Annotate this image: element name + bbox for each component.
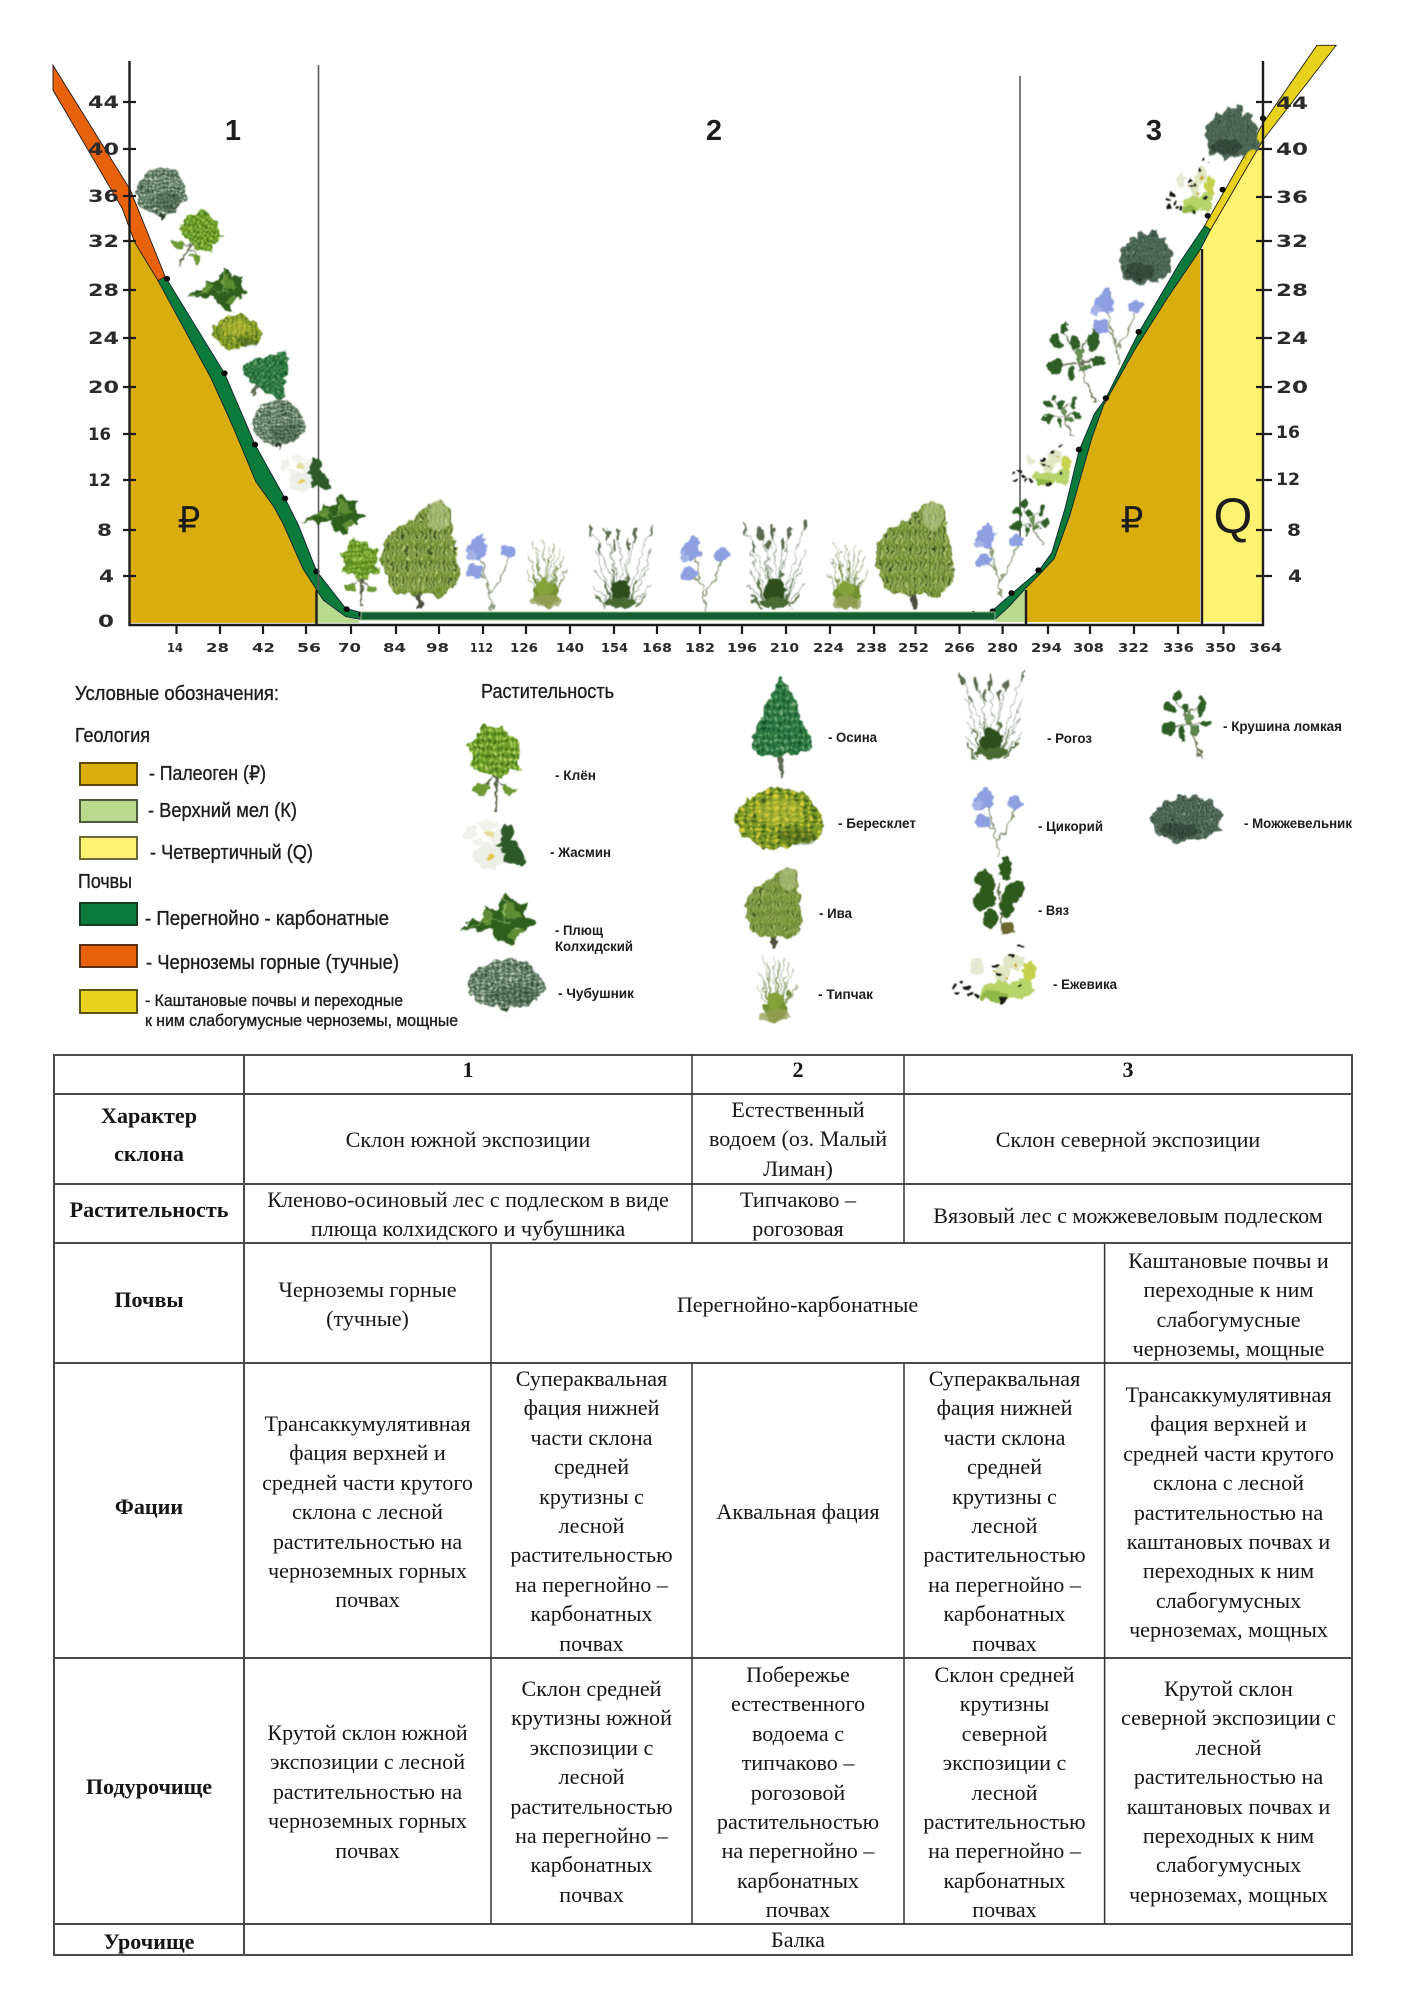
right axis labels: 28 [1276,281,1308,301]
cell: superaqual facies left: Супераквальная [516,1366,667,1391]
bottom axis labels: 196 [727,641,757,655]
legend icon: ivy [460,892,534,946]
cell: superaqual facies left: карбонатных [531,1601,652,1626]
cell: superaqual facies left: почвах [559,1631,624,1656]
label: paleogene: - Палеоген (₽) [149,763,266,785]
right slope geology and soils [970,45,1336,622]
label: reedmace: - Рогоз [1047,730,1092,746]
cell: moderate south slope: Склон средней [522,1676,661,1701]
cell: moderate south slope: крутизны южной [511,1705,672,1730]
left axis labels: 8 [97,521,112,541]
cell: superaqual facies right: растительностью [923,1542,1086,1567]
plant: blackberry low [1013,444,1072,486]
plant: willow right [876,500,955,610]
bottom axis labels: 84 [383,641,406,655]
cell: shoreline: водоема с [752,1721,844,1746]
plant: reedmace 1 [588,522,653,608]
cell: steep south slope: экспозиции с лесной [270,1749,465,1774]
cell: shoreline: карбонатных [737,1868,859,1893]
label: fescue: - Типчак [818,986,874,1002]
cell: shoreline: естественного [731,1691,865,1716]
bottom axis labels: 28 [206,641,229,655]
right axis labels: 24 [1276,329,1308,349]
row label: slope character [101,1103,197,1166]
swatch: paleogene [80,763,137,785]
left axis labels: 16 [88,425,111,445]
cell: chestnut soils: переходные к ним [1144,1277,1313,1302]
label: humus-carbonate: - Перегнойно - карбонатные [145,908,389,930]
plant: chubushnik [137,167,186,221]
cell: gully: Балка [771,1927,825,1952]
label: willow: - Ива [819,905,852,921]
cell: superaqual facies left [510,1366,673,1656]
cell: chestnut soils: слабогумусные [1156,1307,1301,1332]
plant: chicory 2 [679,536,731,612]
legend [75,671,1353,1030]
bottom axis labels: 112 [470,641,493,655]
soil: humus-carbonate slope left [158,277,361,620]
cell: moderate north slope: северной [962,1721,1047,1746]
right axis labels: 4 [1288,567,1302,587]
bottom axis labels: 168 [642,641,672,655]
cell: north slope: Склон северной экспозиции [996,1127,1260,1152]
bottom axis labels [167,641,1282,655]
cell: steep north slope: лесной [1196,1735,1261,1760]
paleogene symbol right: ₽ [1121,500,1143,541]
label: chestnut: - Каштановые почвы и переходные [145,991,403,1010]
left axis labels: 40 [88,140,119,160]
right axis labels: 44 [1276,94,1308,114]
plant: chicory 4 [1091,289,1145,364]
cell: shoreline: на перегнойно – [722,1838,874,1863]
legend icon: euonymus [735,787,823,852]
bottom axis labels: 336 [1163,641,1194,655]
left axis labels: 44 [88,93,119,113]
cell: transaccumulative facies right: переходных к ним [1143,1558,1314,1583]
right axis labels: 40 [1276,140,1308,160]
geology: paleogene right [1026,250,1200,622]
cell: shoreline: почвах [766,1897,830,1922]
cell: steep north slope: переходных к ним [1143,1823,1314,1848]
bottom axis labels: 210 [770,641,799,655]
right axis labels: 8 [1287,521,1301,541]
valley floor soil band [361,612,995,620]
cell: superaqual facies left: фация нижней [524,1395,659,1420]
cell: steep south slope: черноземных горных [268,1808,467,1833]
cell: moderate north slope: карбонатных [944,1868,1065,1893]
legend icon: elm [971,855,1028,934]
cell: superaqual facies left: растительностью [510,1542,673,1567]
cell: moderate north slope: почвах [972,1897,1037,1922]
label: upper cretaceous: - Верхний мел (К) [148,800,297,822]
cell: moderate north slope: экспозиции с [943,1750,1066,1775]
cell: humus-carbonate: Перегнойно-карбонатные [677,1292,918,1317]
soil: humus-carbonate slope right [994,226,1210,619]
bottom axis labels: 294 [1031,641,1062,655]
cell: moderate south slope: карбонатных [531,1852,652,1877]
cell: transaccumulative facies left: склона с лесной [292,1499,443,1524]
cell: superaqual facies right [923,1366,1086,1656]
legend icon: chicory [972,786,1024,857]
cell: superaqual facies right: на перегнойно – [928,1572,1081,1597]
plant: juniper high [1204,104,1260,161]
left axis labels: 28 [88,281,119,301]
plant: elm low [1011,499,1049,547]
soil: chestnut band [1205,45,1336,230]
cell: moderate south slope: лесной [559,1764,624,1789]
header: column 3: 3 [1122,1057,1134,1082]
left axis labels: 32 [88,232,119,252]
cell: shoreline: Побережье [746,1662,850,1687]
cell: moderate north slope: лесной [972,1780,1037,1805]
vegetation heading: Растительность [481,681,614,703]
cell: water body: Естественный [731,1097,865,1122]
cell: transaccumulative facies right: средней части крутого [1123,1441,1334,1466]
cell: transaccumulative facies left [262,1411,473,1612]
cell: moderate south slope: почвах [559,1882,624,1907]
row label: soils: Почвы [114,1287,184,1312]
geology: quaternary [1201,140,1263,622]
zone number 1: 1 [225,115,241,147]
axis ticks [123,102,1272,634]
bottom axis labels: 182 [685,641,715,655]
cell: chestnut soils: Каштановые почвы и [1128,1248,1329,1273]
cell: moderate south slope: растительностью [510,1794,673,1819]
soil sample points right [970,115,1266,617]
cell: moderate north slope: крутизны [960,1691,1049,1716]
label: buckthorn: - Крушина ломкая [1223,718,1342,734]
cell: shoreline: растительностью [717,1809,879,1834]
cell: transaccumulative facies right: фация верхней и [1150,1411,1307,1436]
zone number 3: 3 [1146,115,1162,147]
cell: moderate south slope: экспозиции с [530,1735,653,1760]
legend icon: jasmine [464,820,525,870]
row label: locality: Урочище [104,1929,194,1954]
cell: moderate south slope [510,1676,673,1907]
plant: maple lower [341,537,379,606]
plant: chubushnik lower [253,400,303,451]
label: ivy: - Плющ [555,922,603,938]
zone dividers [318,65,1020,590]
plant: ivy lower [302,493,364,534]
cell: mountain chernozem [278,1277,457,1331]
left axis labels: 4 [99,567,114,587]
label: chestnut: к ним слабогумусные черноземы, мощные [145,1011,458,1030]
header: column 1: 1 [462,1057,474,1082]
label: quaternary: - Четвертичный (Q) [150,842,313,864]
swatch: quaternary [80,837,137,859]
cell: moderate north slope [923,1662,1086,1922]
vegetation on the profile [137,104,1260,612]
plant: jasmine [280,455,329,492]
cell: south slope: Склон южной экспозиции [346,1127,590,1152]
cell: transaccumulative facies left: Трансаккумулятивная [264,1411,471,1436]
right axis labels [1276,94,1308,587]
header: column 2: 2 [792,1057,804,1082]
bottom axis labels: 56 [297,641,321,655]
cell: fescue-reedmace [740,1187,856,1241]
row label: facies: Фации [115,1494,183,1519]
cell: superaqual facies right: фация нижней [937,1395,1072,1420]
bottom axis labels: 322 [1118,641,1149,655]
bottom axis labels: 140 [556,641,584,655]
label: ivy: Колхидский [555,938,633,954]
cell: superaqual facies right: Супераквальная [929,1366,1080,1391]
cell: superaqual facies left: на перегнойно – [515,1572,668,1597]
cell: transaccumulative facies left: фация верхней и [289,1440,446,1465]
paleogene symbol left: ₽ [178,500,200,541]
row label: slope character: Характер [101,1103,197,1128]
left axis labels: 12 [88,471,111,491]
cell: transaccumulative facies right: слабогумусных [1156,1588,1301,1613]
cell: elm forest: Вязовый лес с можжевеловым подлеском [933,1203,1323,1228]
right axis labels: 20 [1276,378,1308,398]
cell: steep north slope: слабогумусных [1156,1852,1301,1877]
bottom axis labels: 42 [252,641,275,655]
bottom axis labels: 266 [944,641,975,655]
cell: fescue-reedmace: рогозовая [752,1216,844,1241]
plant: fescue 1 [526,541,567,607]
cell: steep north slope: каштановых почвах и [1127,1794,1330,1819]
cell: superaqual facies left: средней [554,1454,629,1479]
plant: elm mid [1042,392,1081,438]
row label: vegetation: Растительность [70,1197,228,1222]
cell: water body: водоем (оз. Малый [709,1126,887,1151]
cell: moderate south slope: на перегнойно – [515,1823,668,1848]
plant: willow left [382,500,460,610]
cell: moderate north slope: Склон средней [935,1662,1074,1687]
cell: transaccumulative facies left: почвах [335,1587,400,1612]
legend heading: Условные обозначения: [75,683,279,705]
cell: superaqual facies right: крутизны с [952,1484,1057,1509]
cell: moderate north slope: на перегнойно – [928,1838,1081,1863]
label: juniper: - Можжевельник [1244,815,1353,831]
cell: transaccumulative facies right: каштановых почвах и [1127,1529,1330,1554]
swatch: mountain chernozem [80,945,137,967]
cell: steep south slope: растительностью на [273,1779,462,1804]
label: euonymus: - Бересклет [838,815,916,831]
label: chicory: - Цикорий [1038,818,1103,834]
cell: steep north slope: растительностью на [1134,1764,1323,1789]
label: chestnut [145,991,458,1030]
legend icon: blackberry [952,945,1037,1002]
swatch: upper cretaceous [80,800,137,822]
soils subheading: Почвы [78,871,132,893]
geology subheading: Геология [75,725,150,747]
bottom axis labels: 224 [813,641,844,655]
cell: transaccumulative facies right: Трансаккумулятивная [1125,1382,1332,1407]
bottom axis labels: 308 [1073,641,1104,655]
label: elm: - Вяз [1038,902,1069,918]
plant: aspen [230,336,308,414]
cell: superaqual facies right: лесной [972,1513,1037,1538]
cell: shoreline: типчаково – [742,1750,854,1775]
cell: steep north slope: Крутой склон [1164,1676,1293,1701]
plant: chicory 1 [465,534,517,610]
cell: steep south slope: почвах [335,1838,400,1863]
legend icon: chubushnik [467,959,545,1015]
cell: steep south slope: Крутой склон южной [267,1720,468,1745]
cell: transaccumulative facies right [1123,1382,1334,1642]
cell: mountain chernozem: Черноземы горные [278,1277,457,1302]
legend icon: juniper [1150,792,1224,843]
plant: reedmace 2 [742,520,808,608]
plant: fescue 2 [828,543,868,609]
row label: sub-locality: Подурочище [86,1774,212,1799]
soil sample points left [164,276,365,617]
cell: superaqual facies left: лесной [559,1513,624,1538]
cell: fescue-reedmace: Типчаково – [740,1187,856,1212]
terrain profile chart [53,45,1336,655]
cell: water body [709,1097,887,1181]
label: ivy [555,922,633,954]
label: mountain chernozem: - Черноземы горные (тучные) [146,952,399,974]
bottom axis labels: 98 [426,641,449,655]
cell: water body: Лиман) [763,1156,833,1181]
cell: chestnut soils: черноземы, мощные [1133,1336,1324,1361]
bottom axis labels: 252 [898,641,929,655]
swatch: chestnut [80,990,137,1013]
cell: transaccumulative facies right: склона с лесной [1153,1470,1304,1495]
geology: paleogene left [129,242,317,623]
plant: chicory 3 [974,523,1025,598]
geology: upper cretaceous right [996,588,1026,622]
cell: transaccumulative facies left: растительностью на [273,1529,462,1554]
plant: buckthorn [1046,319,1104,403]
bottom axis labels: 364 [1249,641,1282,655]
bottom axis labels: 70 [338,641,361,655]
left axis labels: 24 [88,329,119,349]
cell: shoreline [717,1662,879,1922]
left axis labels: 20 [88,378,119,398]
bottom axis labels: 238 [856,641,887,655]
plant: maple [159,202,230,277]
legend icon: buckthorn [1161,689,1211,759]
geology: upper cretaceous left [317,590,359,623]
left axis labels [88,93,119,632]
left axis labels: 36 [88,187,119,207]
plant: euonymus [212,314,261,350]
label: jasmine: - Жасмин [550,844,611,860]
cell: aquatic facies: Аквальная фация [716,1499,880,1524]
bottom axis labels: 154 [601,641,628,655]
cell: shoreline: рогозовой [751,1780,845,1805]
label: maple: - Клён [555,767,596,783]
cell: transaccumulative facies left: черноземных горных [268,1558,467,1583]
cell: transaccumulative facies left: средней части крутого [262,1470,473,1495]
cell: mountain chernozem: (тучные) [326,1306,409,1331]
left axis labels: 0 [98,612,114,632]
cell: maple-aspen forest: плюща колхидского и чубушника [311,1216,625,1241]
cell: superaqual facies right: части склона [944,1425,1065,1450]
cell: superaqual facies left: части склона [531,1425,652,1450]
legend icon: maple [467,723,522,813]
cell: moderate north slope: растительностью [923,1809,1086,1834]
legend icon: aspen [751,675,813,778]
label: blackberry: - Ежевика [1053,976,1117,992]
cell: steep south slope [267,1720,468,1863]
zone number 2: 2 [706,115,722,147]
cell: maple-aspen forest: Кленово-осиновый лес с подлеском в виде [267,1187,669,1212]
cell: transaccumulative facies right: черноземах, мощных [1129,1617,1328,1642]
bottom axis labels: 280 [987,641,1018,655]
plant: juniper mid [1118,229,1174,286]
right axis labels: 12 [1276,470,1300,490]
legend icon: willow [745,867,804,948]
cell: superaqual facies right: карбонатных [944,1601,1065,1626]
left slope geology and soils [53,65,365,623]
bottom axis labels: 126 [510,641,538,655]
plant: blackberry high [1167,159,1214,215]
bottom axis labels: 350 [1205,641,1236,655]
cell: superaqual facies right: почвах [972,1631,1037,1656]
plant: ivy [186,268,248,310]
quaternary symbol: Q [1214,488,1252,544]
row label: slope character: склона [114,1141,184,1166]
right axis labels: 32 [1276,232,1308,252]
soil: mountain chernozem band [53,65,165,281]
cell: steep north slope [1121,1676,1336,1907]
legend icon: reedmace [958,671,1025,758]
label: chubushnik: - Чубушник [558,985,635,1001]
legend icon: fescue [757,955,796,1022]
cell: steep north slope: северной экспозиции с [1121,1705,1336,1730]
cell: superaqual facies right: средней [967,1454,1042,1479]
label: aspen: - Осина [828,729,877,745]
cell: chestnut soils [1128,1248,1329,1361]
cell: superaqual facies left: крутизны с [539,1484,644,1509]
bottom axis labels: 14 [167,641,183,655]
axes [130,61,1263,625]
right axis labels: 36 [1276,188,1308,208]
right axis labels: 16 [1276,423,1300,443]
cell: maple-aspen forest [267,1187,669,1241]
cell: steep north slope: черноземах, мощных [1129,1882,1328,1907]
cell: transaccumulative facies right: растительностью на [1134,1500,1323,1525]
swatch: humus-carbonate [80,903,137,925]
